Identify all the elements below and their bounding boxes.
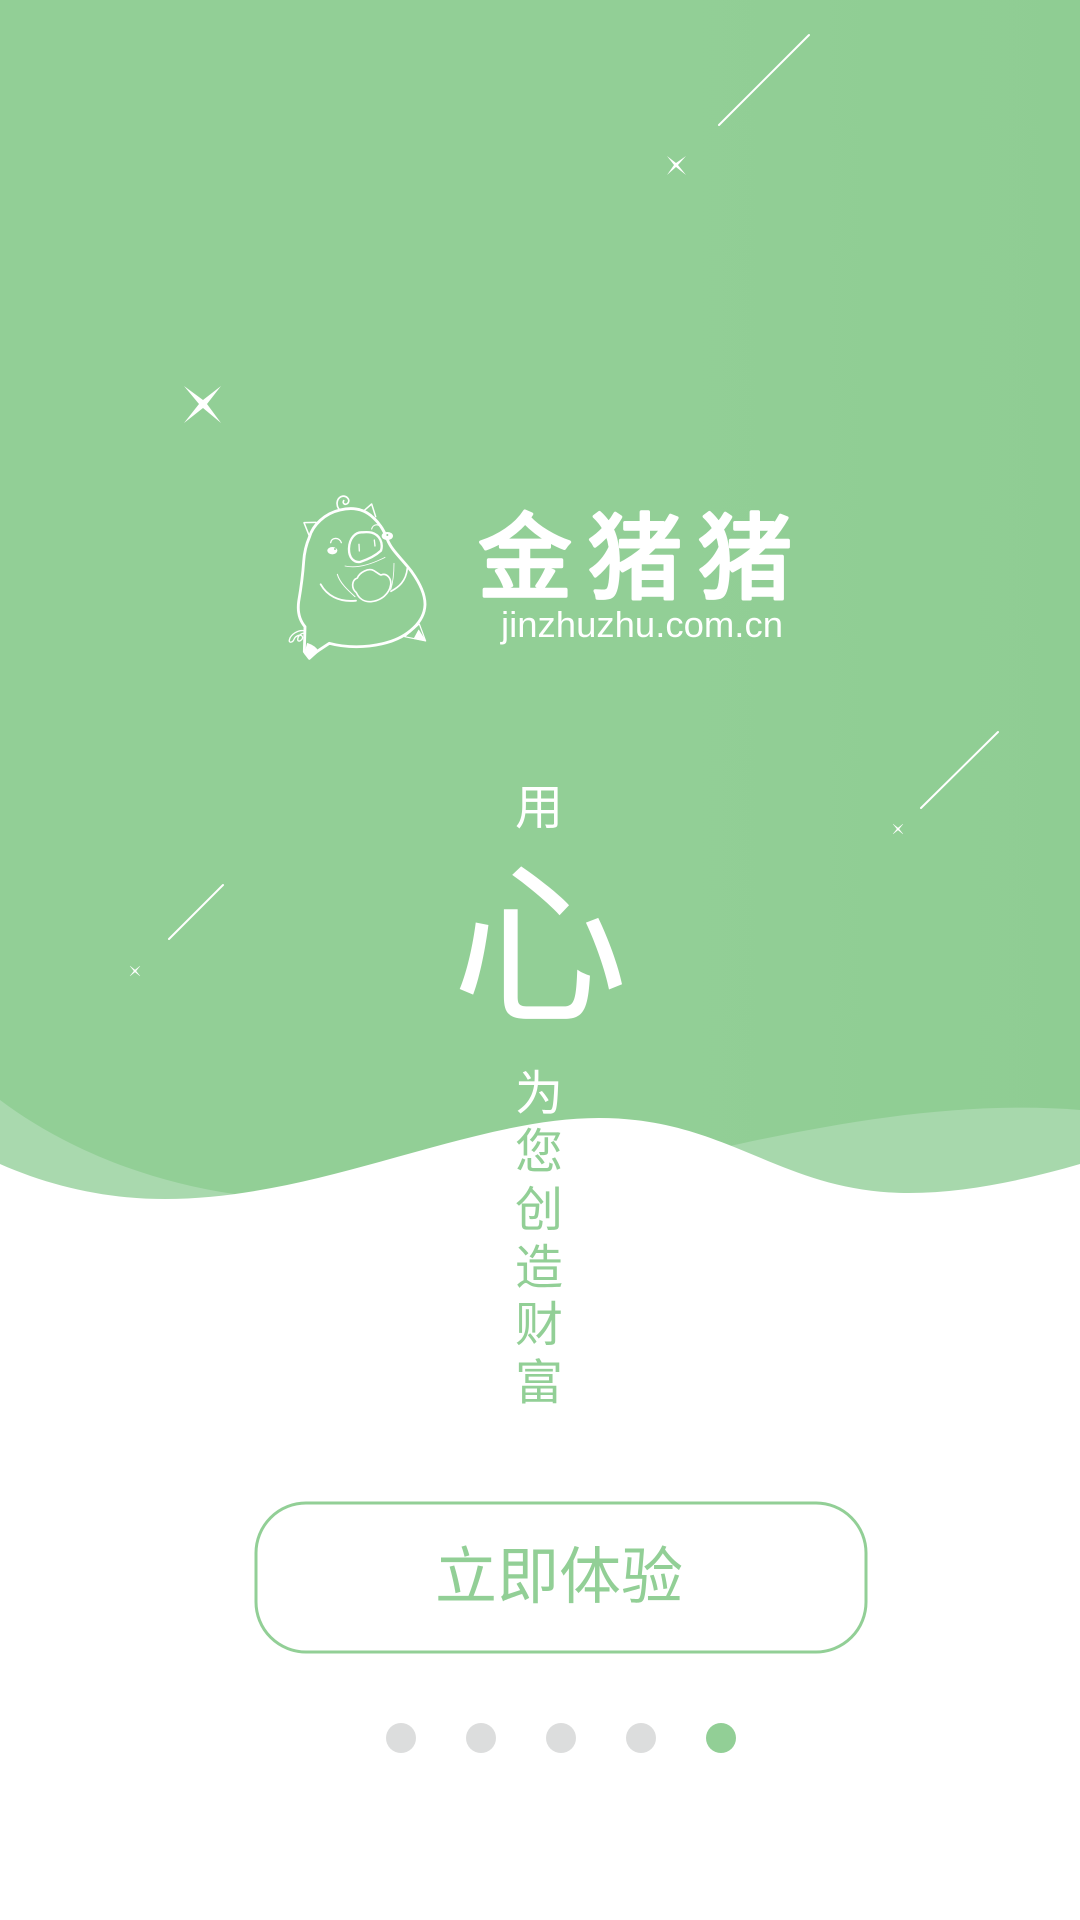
- decorative sparkle lines: [169, 35, 998, 939]
- white wave panel: [0, 1118, 1080, 1920]
- slogan char 富: 富: [515, 1357, 563, 1410]
- slogan char 财: 财: [515, 1299, 563, 1352]
- slogan char 您: 您: [515, 1126, 563, 1179]
- logo wordmark: 金猪猪: [478, 506, 792, 611]
- button label: 立即体验: [435, 1543, 683, 1612]
- button: try now: [256, 1503, 866, 1652]
- pagination dots: [386, 1723, 736, 1753]
- slogan char 创: 创: [515, 1184, 563, 1237]
- icon: right small sparkle star: [893, 824, 903, 834]
- green background panel: [0, 0, 1080, 1220]
- icon: pig mascot: [289, 496, 426, 659]
- slogan char 为: 为: [515, 1068, 563, 1121]
- icon: left small sparkle star: [130, 966, 140, 976]
- vertical slogan: [515, 1068, 563, 1410]
- light wave left: [0, 1100, 234, 1215]
- slogan char 造: 造: [515, 1242, 563, 1295]
- text: 用: 用: [515, 782, 563, 835]
- icon: top sparkle star: [667, 156, 686, 175]
- light wave right: [700, 1108, 1080, 1215]
- icon: large sparkle star: [184, 386, 221, 423]
- text: 心: 心: [452, 850, 628, 1046]
- logo domain text: jinzhuzhu.com.cn: [500, 604, 783, 645]
